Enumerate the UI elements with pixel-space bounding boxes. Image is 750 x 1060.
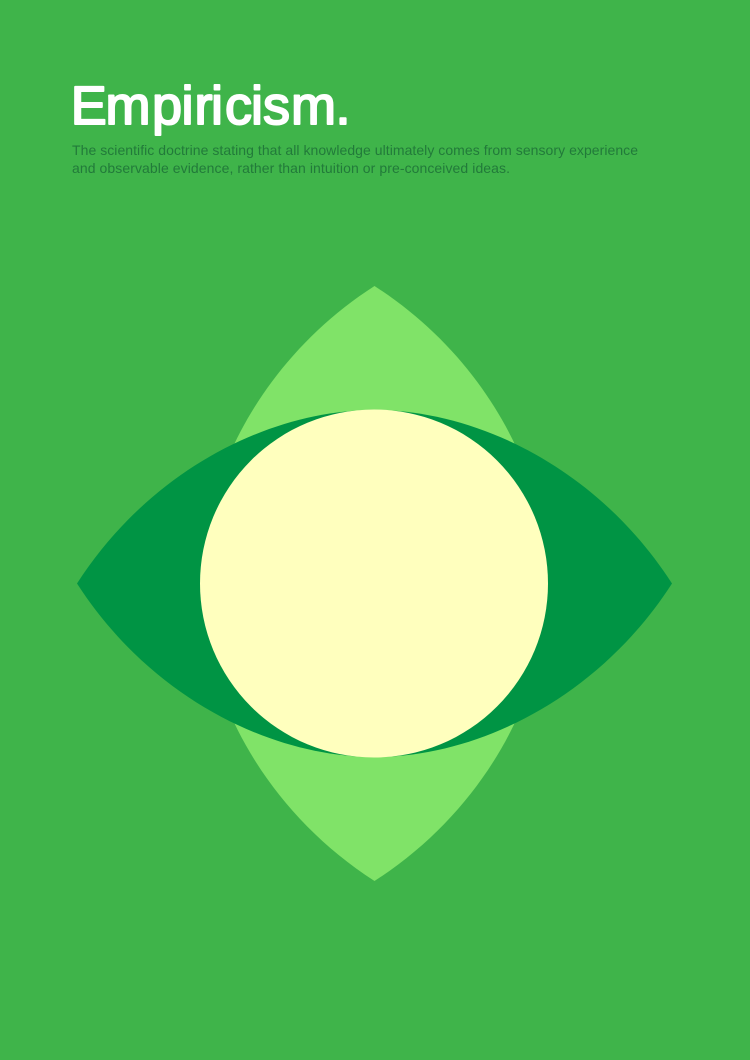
description — [72, 142, 638, 176]
horizontal dark green eye shape — [77, 410, 672, 757]
pale yellow pupil circle — [200, 410, 548, 758]
title: Empiricism. — [71, 76, 351, 136]
eye diagram — [77, 286, 672, 881]
description line 2: and observable evidence, rather than intuition or pre-conceived ideas. — [72, 160, 510, 176]
vertical light green leaf — [201, 286, 548, 881]
description line 1: The scientific doctrine stating that all knowledge ultimately comes from sensory experience — [72, 142, 638, 158]
